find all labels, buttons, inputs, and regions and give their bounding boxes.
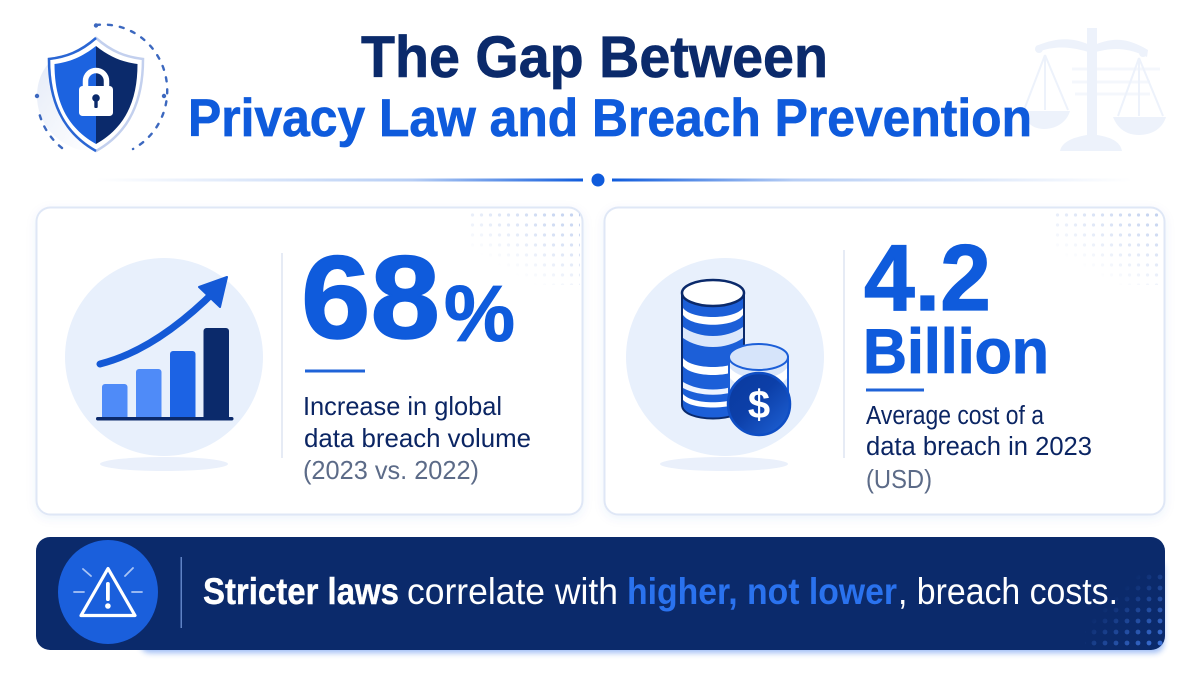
title <box>188 25 1032 148</box>
description: breach volume: (2023 vs. 2022) <box>303 455 479 485</box>
description: breach volume: data breach volume <box>304 423 531 453</box>
description: breach volume: Increase in global <box>303 391 502 421</box>
description: breach cost <box>866 402 1092 494</box>
callout banner <box>36 537 1165 653</box>
icon: faded scales of justice <box>1022 28 1166 151</box>
title line one: The Gap Between <box>361 25 828 90</box>
statistic: 4.2 Billion: 4.2 <box>864 225 991 330</box>
statistic: 4.2 Billion: Billion <box>863 317 1049 387</box>
panel: breach cost <box>604 208 1164 514</box>
statistic: 68% <box>301 232 515 364</box>
icon: warning triangle <box>58 540 158 644</box>
icon: security shield with padlock <box>35 23 167 151</box>
callout text: correlate with <box>407 571 618 612</box>
title divider <box>95 174 1132 186</box>
statistic: 4.2 Billion <box>863 225 1049 387</box>
callout text: Stricter laws <box>203 571 399 612</box>
description: breach cost: (USD) <box>866 466 932 494</box>
title line two: Privacy Law and Breach Prevention <box>188 89 1032 148</box>
description: breach cost: Average cost of a <box>866 402 1045 430</box>
callout text: , breach costs. <box>898 571 1118 612</box>
icon: rising bar chart <box>65 258 263 471</box>
panel: breach volume <box>36 208 582 514</box>
description: breach volume <box>303 391 531 485</box>
icon: coin stacks <box>626 258 824 471</box>
icon: coin stacks: $ <box>748 383 770 427</box>
callout text: higher, not lower <box>627 571 897 612</box>
description: breach cost: data breach in 2023 <box>866 433 1092 461</box>
statistic: 68%: % <box>444 269 515 358</box>
statistic: 68%: 68 <box>301 232 440 364</box>
